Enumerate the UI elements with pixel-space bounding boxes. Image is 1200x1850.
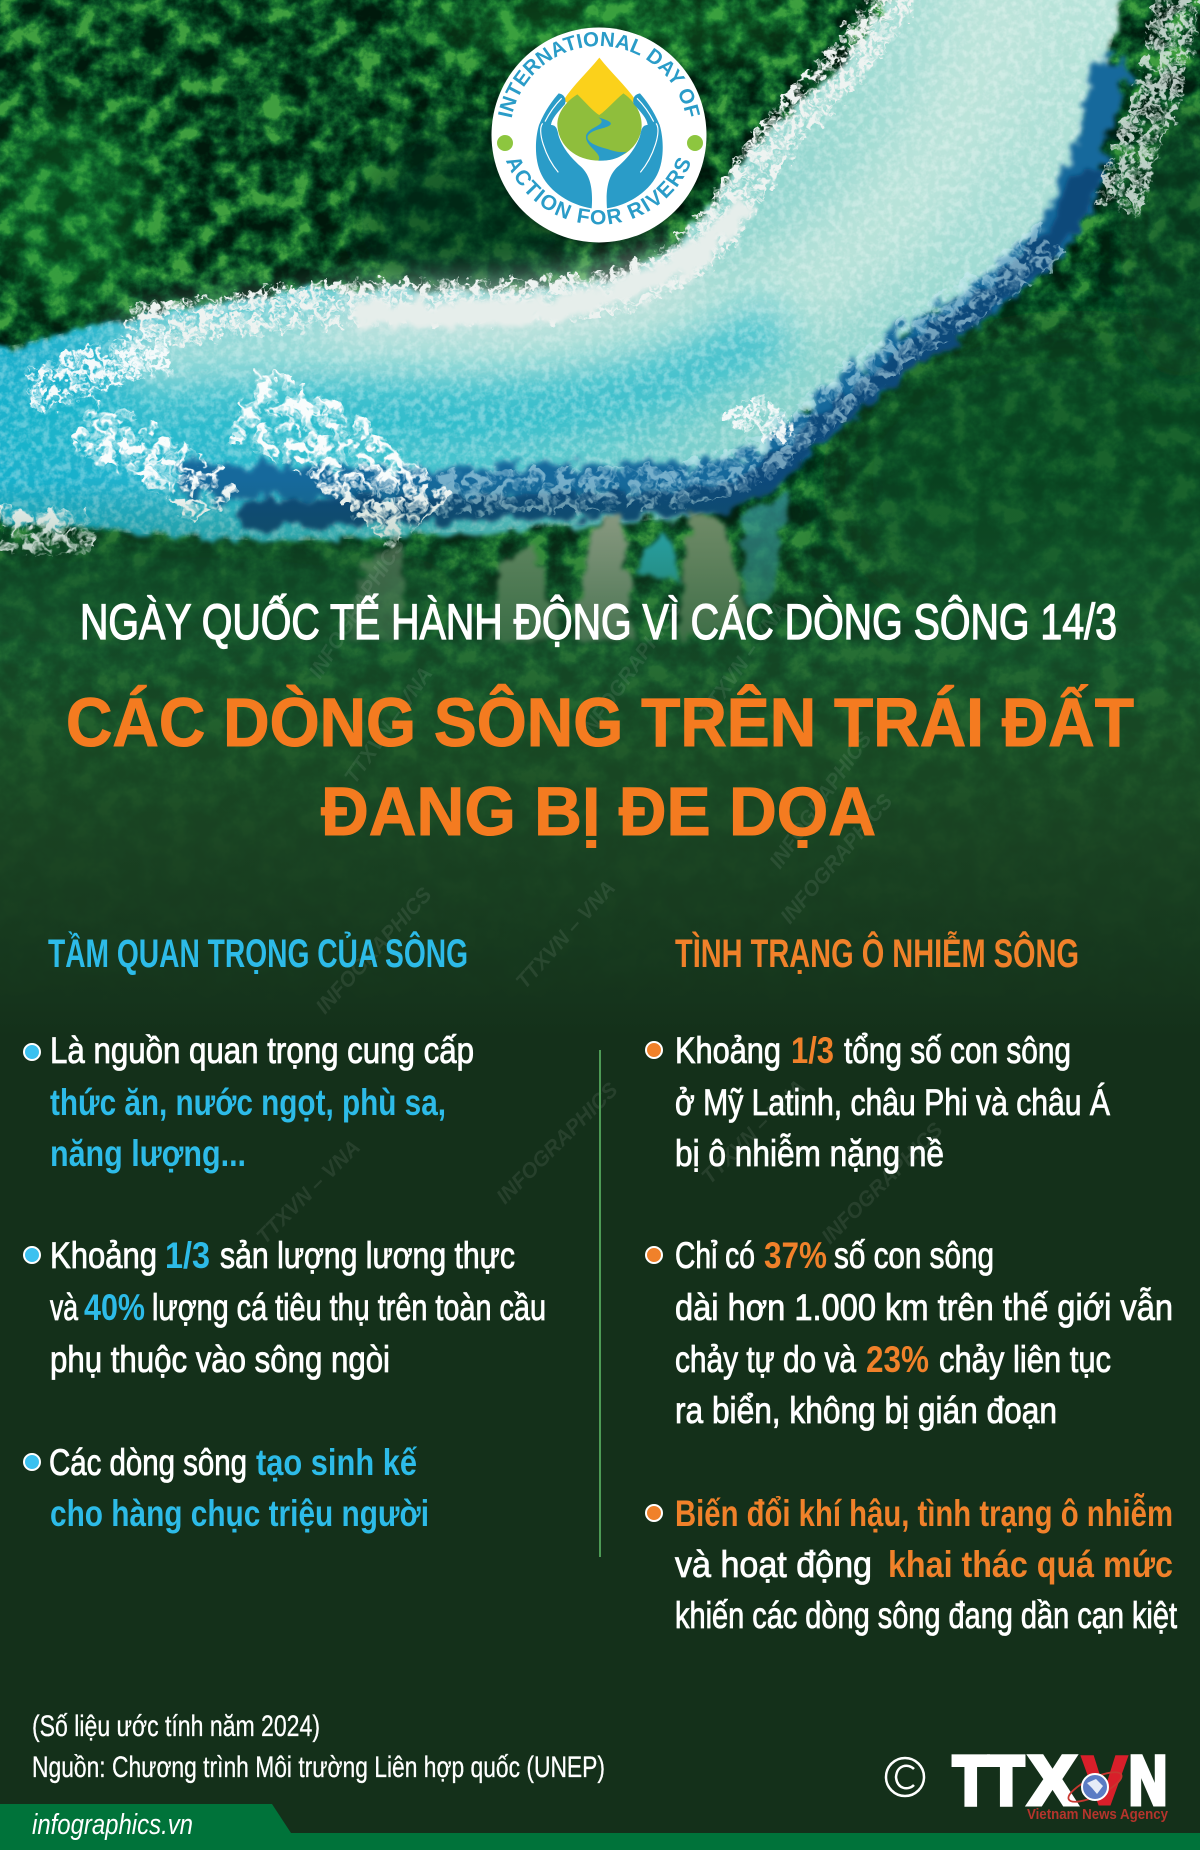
pale sand near the bend: [330, 270, 690, 325]
water speckle texture: [0, 0, 1200, 560]
green valley: [557, 93, 642, 161]
heading: importance: TẦM QUAN TRỌNG CỦA SÔNG: [48, 930, 468, 976]
point: food production: 40%: [84, 1287, 145, 1328]
point: polluted rivers: tổng số con sông: [844, 1030, 1071, 1071]
watermarks: TTXVN – VNA: [512, 876, 620, 993]
point: food production: và: [50, 1287, 78, 1328]
point: free-flowing rivers: [646, 1235, 1173, 1431]
logo shadow: [492, 31, 708, 247]
point: livelihoods: tạo sinh kế: [256, 1442, 417, 1483]
watermarks: INFOGRAPHICS: [765, 728, 876, 873]
point: free-flowing rivers: chảy tự do và: [675, 1339, 856, 1380]
watermarks: TTXVN – VNA: [252, 1136, 365, 1249]
watermarks: INFOGRAPHICS: [776, 790, 897, 928]
point: livelihoods: [24, 1442, 429, 1534]
point: free-flowing rivers: 23%: [866, 1339, 929, 1380]
white pebble bank: [130, 0, 905, 328]
copyright symbol: [886, 1758, 924, 1796]
winding river: [586, 117, 627, 161]
photo: aerial view of river through forest: [0, 0, 1200, 816]
point: polluted rivers: bị ô nhiễm nặng nề: [675, 1133, 944, 1174]
source note: (Số liệu ước tính năm 2024): [32, 1710, 320, 1743]
watermarks: INFOGRAPHICS: [305, 534, 410, 683]
bright turquoise lower water: [0, 325, 780, 440]
point: polluted rivers: 1/3: [791, 1030, 834, 1071]
point: livelihoods: cho hàng chục triệu người: [50, 1493, 429, 1534]
pale central current: [130, 0, 1010, 375]
panel: importance of rivers: [24, 930, 546, 1534]
point: food and water: [24, 1030, 474, 1174]
TTXVN agency logo: N: [1129, 1742, 1167, 1819]
source note: Nguồn: Chương trình Môi trường Liên hợp quốc (UNEP): [32, 1751, 605, 1784]
point: free-flowing rivers: ra biển, không bị gián đoạn: [675, 1390, 1057, 1431]
watermarks: INFOGRAPHICS: [492, 1078, 622, 1209]
point: causes of depletion: và hoạt động: [675, 1544, 872, 1585]
watermarks: INFOGRAPHICS: [817, 1118, 947, 1249]
panel: river pollution: [646, 930, 1178, 1636]
TTXVN agency logo: [953, 1742, 1169, 1823]
point: livelihoods: Các dòng sông: [49, 1442, 247, 1483]
point: food production: Khoảng: [50, 1235, 157, 1276]
source note: [32, 1710, 605, 1784]
dark channel: [240, 170, 1090, 515]
logo side dots: [497, 135, 703, 151]
point: free-flowing rivers: chảy liên tục: [939, 1339, 1111, 1380]
footer bar with tab: [0, 1804, 1200, 1850]
point: food and water: Là nguồn quan trọng cung cấp: [50, 1030, 474, 1071]
point: food production: phụ thuộc vào sông ngòi: [50, 1339, 390, 1380]
white sand base: [360, 210, 740, 316]
white flecks in channel: [350, 240, 1050, 500]
white foam at the bend: [735, 414, 780, 440]
point: polluted rivers: [646, 1030, 1110, 1174]
main title: ĐANG BỊ ĐE DỌA: [321, 773, 876, 850]
point: food and water: thức ăn, nước ngọt, phù sa,: [50, 1082, 446, 1123]
logo arc text top: INTERNATIONAL DAY OF: [498, 32, 700, 118]
watermarks: INFOGRAPHICS: [575, 598, 686, 743]
main title: [66, 684, 1134, 850]
watermarks: INFOGRAPHICS: [312, 883, 436, 1018]
point: free-flowing rivers: Chỉ có: [675, 1235, 755, 1276]
main title: CÁC DÒNG SÔNG TRÊN TRÁI ĐẤT: [66, 684, 1134, 761]
forest shading patches: [0, 0, 1200, 650]
point: free-flowing rivers: 37%: [764, 1235, 827, 1276]
TTXVN agency logo: X: [1029, 1742, 1076, 1819]
fade from photo into dark green panel: [0, 480, 1200, 1040]
point: food production: lượng cá tiêu thụ trên toàn cầu: [152, 1287, 546, 1328]
TTXVN agency logo: Vietnam News Agency: [1027, 1806, 1169, 1823]
white rapids lower left: [0, 405, 420, 533]
forest texture: [0, 0, 1200, 1000]
river water: [0, 0, 1135, 541]
point: causes of depletion: [646, 1493, 1178, 1636]
point: food and water: năng lượng...: [50, 1133, 246, 1174]
left hand: [536, 93, 592, 208]
white rapids upper left: [30, 352, 170, 392]
mossy rock formations: [345, 490, 790, 640]
right hand: [607, 93, 663, 208]
TTXVN agency logo: TT: [953, 1742, 1024, 1819]
point: food production: 1/3: [165, 1235, 210, 1276]
point: polluted rivers: ở Mỹ Latinh, châu Phi và châu Á: [675, 1082, 1110, 1123]
TTXVN agency logo: V: [1082, 1742, 1127, 1819]
logo arc text bottom: ACTION FOR RIVERS: [506, 158, 690, 224]
point: free-flowing rivers: số con sông: [834, 1235, 994, 1276]
point: polluted rivers: Khoảng: [675, 1030, 781, 1071]
logo emblem: drop and hands: [536, 58, 663, 208]
footer website: infographics.vn: [32, 1809, 193, 1841]
upper right pebble bank: [1120, 0, 1180, 210]
watermarks: TTXVN – VNA: [697, 1076, 810, 1189]
deep blue channel along the lower bank: [180, 60, 1112, 486]
watermarks: TTXVN – VNA: [340, 663, 437, 788]
yellow drop tip: [563, 58, 636, 120]
finger lines: [541, 98, 658, 172]
point: food production: sản lượng lương thực: [220, 1235, 515, 1276]
point: food production: [24, 1235, 546, 1380]
logo: International Day of Action for Rivers: [489, 27, 712, 250]
logo disc: [492, 28, 706, 242]
watermarks: TTXVN – VNA: [695, 598, 792, 723]
watermarks: [252, 534, 947, 1249]
globe emblem: [1065, 1767, 1125, 1807]
